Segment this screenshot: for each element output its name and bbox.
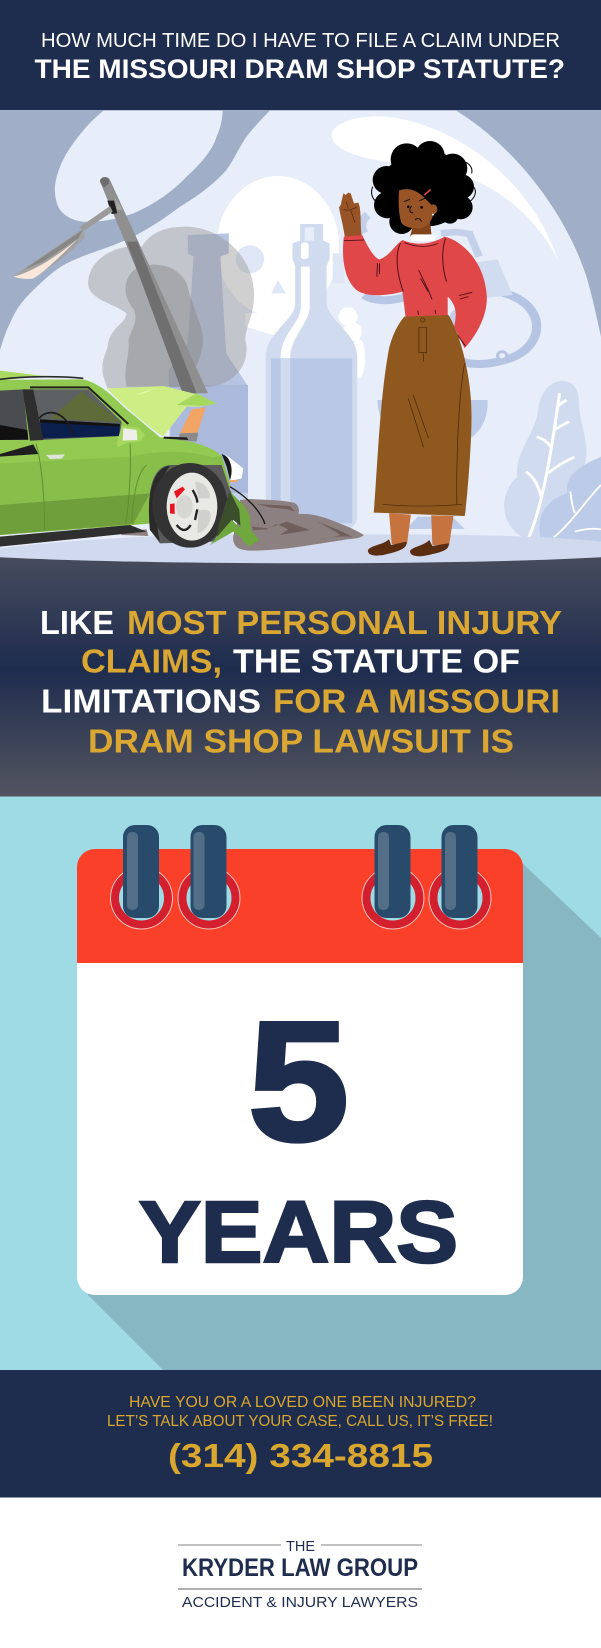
crumpled hood (107, 386, 217, 437)
upper panel (0, 379, 222, 463)
shirt (343, 235, 487, 348)
call to action band (0, 1370, 601, 1498)
statement line 2: THE STATUTE OF (233, 642, 520, 680)
face (399, 189, 433, 228)
binding holes (110, 867, 491, 929)
statement line 1: LIKE (40, 604, 114, 641)
rear roof (0, 371, 43, 381)
calendar red header (77, 849, 523, 963)
ground (0, 534, 601, 563)
statement line 2 (81, 642, 520, 680)
ear (429, 204, 437, 214)
lower rear window (0, 444, 38, 457)
dark statement band (0, 556, 601, 797)
front window (33, 389, 122, 440)
phone number: (314) 334-8815 (168, 1437, 433, 1474)
bumper debris (217, 490, 242, 540)
woman body (343, 234, 487, 556)
left bottle (169, 233, 248, 503)
binding clips (123, 825, 478, 918)
lamp post (13, 177, 208, 393)
logo divider (178, 1588, 422, 1590)
clip highlights (127, 832, 456, 910)
pale blob upper left (55, 111, 223, 222)
car (0, 371, 265, 548)
door handle (46, 454, 65, 459)
oil puddle (233, 499, 364, 551)
lower shade (0, 493, 150, 535)
sill (0, 525, 147, 547)
plant dark (539, 457, 601, 542)
pale dome (0, 111, 601, 550)
front bumper (222, 454, 232, 480)
tyre (152, 463, 228, 548)
number five: 5 (248, 987, 349, 1177)
plant veins (526, 393, 601, 537)
necklace (410, 234, 435, 241)
hair curls (372, 162, 475, 202)
shirt folds (344, 238, 472, 346)
rear window (0, 389, 28, 440)
palm lines (343, 202, 357, 223)
rim slots (177, 490, 197, 530)
steering wheel (39, 413, 73, 436)
neck (410, 221, 432, 240)
handcuff plate (476, 260, 513, 298)
shadow under car (120, 529, 148, 536)
calendar page (77, 963, 523, 1295)
call to action line 1: HAVE YOU OR A LOVED ONE BEEN INJURED? (129, 1394, 476, 1411)
rim (167, 473, 217, 541)
law firm logo (178, 1538, 422, 1611)
statement line 4: DRAM SHOP LAWSUIT IS (88, 722, 514, 760)
door lines (36, 443, 147, 530)
pale strip (248, 360, 266, 527)
statement line 3 (41, 682, 560, 720)
calendar long shadow (88, 860, 601, 1370)
hair clip (424, 189, 431, 195)
calendar panel background (0, 796, 601, 1370)
pole base behind hood (180, 407, 206, 433)
plant light (504, 381, 586, 541)
shoes (368, 539, 449, 556)
statement line 2: CLAIMS, (81, 642, 222, 680)
lamp head (13, 229, 85, 278)
backdrop (0, 110, 601, 350)
legs (389, 513, 453, 545)
earring (432, 214, 434, 216)
face details (404, 198, 425, 222)
header line 2: THE MISSOURI DRAM SHOP STATUTE? (34, 54, 565, 84)
skirt (374, 315, 471, 516)
goblet (378, 400, 488, 529)
statement text (40, 604, 562, 760)
rim red (170, 487, 185, 514)
handcuffs (362, 215, 537, 364)
window frame (23, 389, 43, 441)
body (0, 379, 230, 535)
call to action line 2: LET’S TALK ABOUT YOUR CASE, CALL US, IT’S FREE! (107, 1413, 493, 1430)
wire (230, 487, 265, 524)
logo the: THE (286, 1538, 315, 1555)
calendar (77, 825, 523, 1295)
logo name: KRYDER LAW GROUP (182, 1554, 418, 1582)
background scene (0, 100, 601, 563)
roof line (0, 377, 83, 379)
skull silhouette (217, 176, 365, 378)
large bottle (266, 224, 357, 532)
woman head (339, 141, 475, 240)
logo tagline: ACCIDENT & INJURY LAWYERS (182, 1595, 418, 1611)
hand (339, 193, 362, 237)
wheel arch (149, 465, 230, 543)
eyes (407, 205, 410, 208)
statement line 3: LIMITATIONS (41, 682, 261, 720)
illustration: crash scene (0, 100, 601, 563)
white dome highlight (332, 116, 558, 261)
years label: YEARS (139, 1184, 458, 1281)
header band (0, 0, 601, 110)
header line 1: HOW MUCH TIME DO I HAVE TO FILE A CLAIM UNDER (41, 30, 560, 52)
logo rules (178, 1544, 422, 1546)
statement line 3: FOR A MISSOURI (273, 682, 560, 720)
skirt details (383, 327, 465, 506)
mirror (117, 426, 145, 447)
statement line 1: MOST PERSONAL INJURY (127, 604, 562, 641)
hood gap (163, 437, 188, 440)
smoke (88, 227, 254, 388)
hair (373, 141, 474, 234)
